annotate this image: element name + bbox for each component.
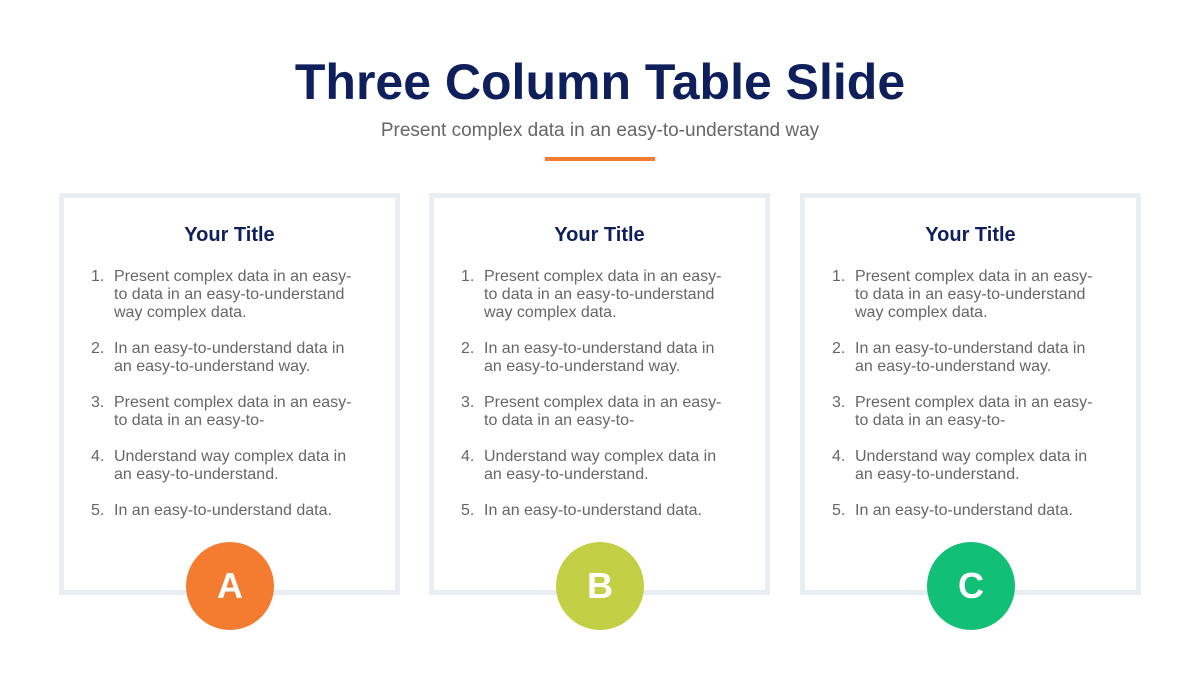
list A: an easy-to-understand way. xyxy=(114,358,310,375)
title: Three Column Table Slide xyxy=(295,54,905,110)
list A: an easy-to-understand. xyxy=(114,466,279,483)
list B: 5. xyxy=(461,502,474,519)
list C: an easy-to-understand way. xyxy=(855,358,1051,375)
panel: C xyxy=(800,193,1141,595)
circle B: B xyxy=(587,565,613,606)
list B: an easy-to-understand. xyxy=(484,466,649,483)
list C: Understand way complex data in xyxy=(855,448,1087,465)
list C: way complex data. xyxy=(855,304,988,321)
list C: 1. xyxy=(832,268,845,285)
list B: an easy-to-understand way. xyxy=(484,358,680,375)
circle A xyxy=(186,542,274,630)
list A: 1. xyxy=(91,268,104,285)
panel title B: Your Title xyxy=(554,224,645,246)
list A: way complex data. xyxy=(114,304,247,321)
list C: 3. xyxy=(832,394,845,411)
list A xyxy=(91,268,351,519)
list B: In an easy-to-understand data in xyxy=(484,340,714,357)
panel title C: Your Title xyxy=(925,224,1016,246)
list A: Present complex data in an easy- xyxy=(114,394,351,411)
list B: 3. xyxy=(461,394,474,411)
list A: 5. xyxy=(91,502,104,519)
panel: A xyxy=(59,193,400,595)
list A: to data in an easy-to- xyxy=(114,412,264,429)
list B: Present complex data in an easy- xyxy=(484,268,721,285)
panel: B xyxy=(429,193,770,595)
list C: 4. xyxy=(832,448,845,465)
list C: to data in an easy-to- xyxy=(855,412,1005,429)
list B: Present complex data in an easy- xyxy=(484,394,721,411)
list B: Understand way complex data in xyxy=(484,448,716,465)
list C: In an easy-to-understand data in xyxy=(855,340,1085,357)
list B: 4. xyxy=(461,448,474,465)
list A: Present complex data in an easy- xyxy=(114,268,351,285)
circle B xyxy=(556,542,644,630)
list B: to data in an easy-to-understand xyxy=(484,286,714,303)
subtitle: Present complex data in an easy-to-understand way xyxy=(381,120,819,141)
list C: 2. xyxy=(832,340,845,357)
list A: Understand way complex data in xyxy=(114,448,346,465)
list C: 5. xyxy=(832,502,845,519)
list C: an easy-to-understand. xyxy=(855,466,1020,483)
orange accent bar xyxy=(545,157,655,161)
list B: 1. xyxy=(461,268,474,285)
list C xyxy=(832,268,1092,519)
list C: Present complex data in an easy- xyxy=(855,394,1092,411)
list B: to data in an easy-to- xyxy=(484,412,634,429)
list B xyxy=(461,268,721,519)
list C: In an easy-to-understand data. xyxy=(855,502,1073,519)
list C: Present complex data in an easy- xyxy=(855,268,1092,285)
list B: way complex data. xyxy=(484,304,617,321)
list A: In an easy-to-understand data. xyxy=(114,502,332,519)
list B: In an easy-to-understand data. xyxy=(484,502,702,519)
list A: 2. xyxy=(91,340,104,357)
list A: 3. xyxy=(91,394,104,411)
list A: 4. xyxy=(91,448,104,465)
list A: to data in an easy-to-understand xyxy=(114,286,344,303)
list B: 2. xyxy=(461,340,474,357)
circle C: C xyxy=(958,565,984,606)
panel title A: Your Title xyxy=(184,224,275,246)
circle C xyxy=(927,542,1015,630)
list C: to data in an easy-to-understand xyxy=(855,286,1085,303)
circle A: A xyxy=(217,565,243,606)
list A: In an easy-to-understand data in xyxy=(114,340,344,357)
